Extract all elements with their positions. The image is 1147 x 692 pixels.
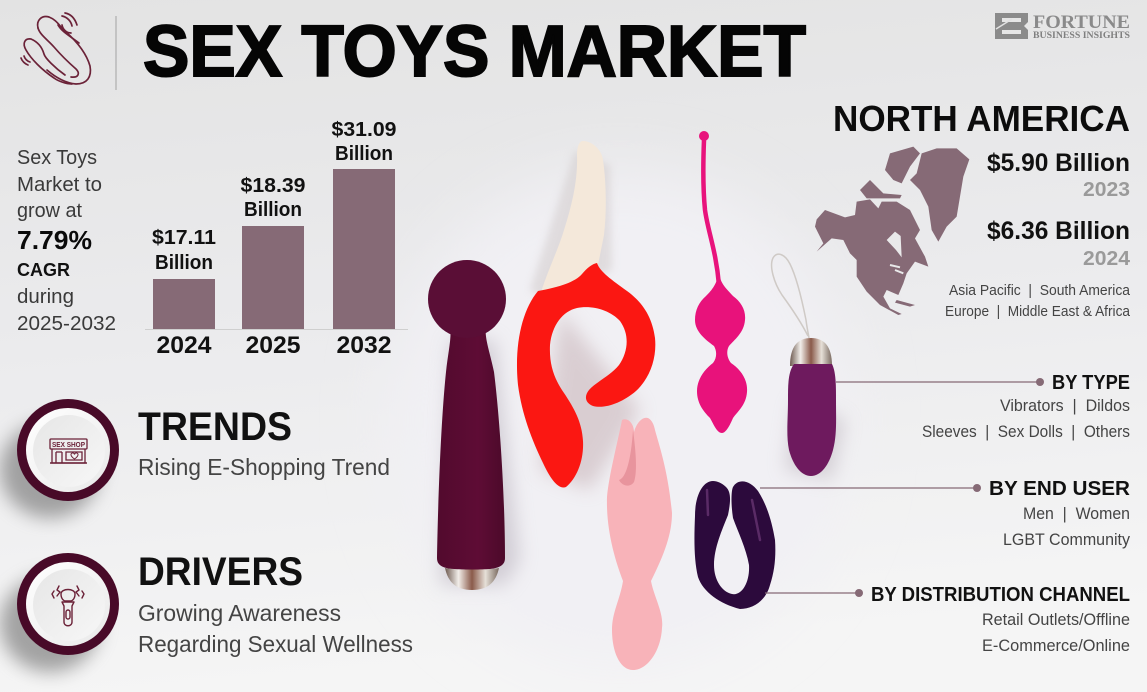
segment: by type [836,372,1130,441]
text block: CAGR summary: CAGR [17,260,70,280]
text block: CAGR summary: during [17,286,74,308]
bar: 2024: 2024 [156,332,212,359]
text: trends detail: Rising E-Shopping Trend [138,454,390,480]
icon: shop badge [0,399,119,518]
stats: North America values [987,149,1131,270]
icon: wellness badge [0,553,119,672]
bar: 2025: $18.39 [240,175,306,197]
text: other regions [945,282,1131,320]
text: drivers detail: Growing Awareness [138,600,341,626]
logo: Fortune Business Insights [995,12,1130,41]
bar: 2024: $17.11 [152,227,216,249]
segment: by distribution channel: E-Commerce/Online [982,636,1130,655]
stats: North America values: 2023 [1083,179,1130,201]
bar: 2024 [152,227,216,359]
segment: by distribution channel: BY DISTRIBUTION CHANNEL [871,584,1130,606]
product: red curved device [517,141,655,490]
product: light pink device [607,418,672,670]
heading: trends: TRENDS [138,405,292,449]
title: SEX TOYS MARKET [143,12,806,92]
icon: market emblem line art [21,13,90,84]
bar: 2025 [240,175,306,359]
text block: CAGR summary: grow at [17,200,82,222]
text: other regions: Europe | Middle East & Africa [945,303,1131,320]
segment: by type: Vibrators | Dildos [1000,396,1130,415]
segment: by end user: Men | Women [1023,504,1130,523]
text block: CAGR summary: 2025-2032 [17,313,116,335]
segment: by type: BY TYPE [1052,372,1130,394]
bar chart: market size [145,119,408,359]
text block: CAGR summary [17,147,116,335]
product: pink beads [695,131,747,433]
segment: by distribution channel: Retail Outlets/Offline [982,610,1130,629]
logo: Fortune Business Insights: FORTUNE [1033,12,1130,33]
bar: 2032 [332,119,396,359]
segment: by end user [760,478,1131,549]
stats: North America values: $5.90 Billion [987,149,1130,177]
segment: by end user: BY END USER [989,478,1131,500]
text: drivers detail: Regarding Sexual Wellness [138,631,413,657]
product: purple bullet with loop [772,254,845,480]
stats: North America values: 2024 [1083,248,1131,270]
bar: 2032: 2032 [336,332,392,359]
stats: North America values: $6.36 Billion [987,217,1130,245]
product: dark purple curved device [694,481,775,609]
heading: North America: NORTH AMERICA [833,98,1130,139]
bar: 2032: Billion [335,143,393,165]
text: other regions: Asia Pacific | South America [949,282,1131,299]
bar: 2032: $31.09 [332,119,396,141]
text block: CAGR summary: Sex Toys [17,147,97,169]
segment: by end user: LGBT Community [1003,530,1130,549]
bar: 2025: 2025 [246,332,300,359]
segment: by type: Sleeves | Sex Dolls | Others [922,422,1130,441]
text block: CAGR summary: 7.79% [17,225,92,255]
icon: shop badge: SEX SHOP [52,442,85,449]
heading: drivers: DRIVERS [138,550,303,594]
text block: CAGR summary: Market to [17,174,102,196]
map: North America [815,147,969,315]
segment: by distribution channel [765,584,1130,655]
product: wand [428,260,520,590]
header divider [115,16,117,90]
text: drivers detail [138,600,413,657]
panel: drivers [0,550,413,672]
bar: 2025: Billion [244,199,302,221]
product photo group [428,131,845,670]
bar: 2024: Billion [155,252,213,274]
panel: trends [0,399,390,518]
logo: Fortune Business Insights: BUSINESS INSIGHTS [1033,31,1130,41]
